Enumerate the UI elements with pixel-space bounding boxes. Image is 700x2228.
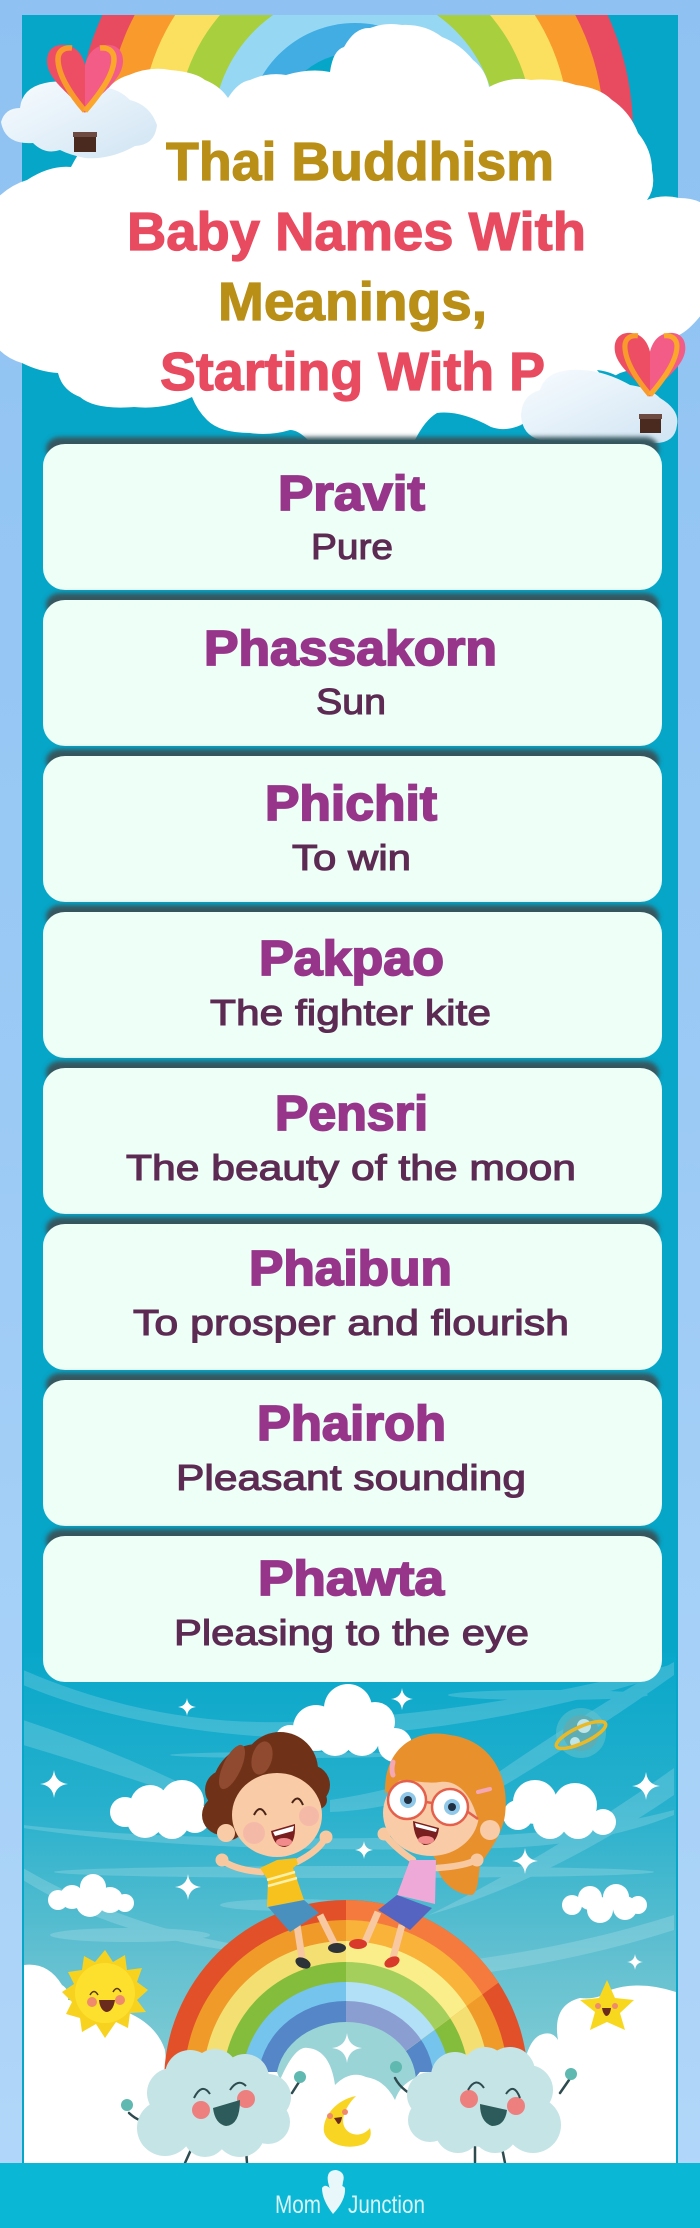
girl — [349, 1733, 506, 1970]
card: Pravit — [43, 437, 662, 590]
small cloud right — [521, 370, 677, 443]
card: Pensri — [43, 1061, 662, 1214]
MomJunction logo — [275, 2170, 425, 2219]
arms — [222, 1838, 325, 1872]
face — [383, 1780, 478, 1856]
cloud: small lower right — [562, 1884, 647, 1923]
cloud: right — [503, 1780, 616, 1839]
icon: sun — [62, 1950, 148, 2038]
MomJunction logo: Mom — [275, 2191, 321, 2219]
card: Pensri: The beauty of the moon — [126, 1147, 576, 1188]
sparkle inside rainbow — [332, 2033, 362, 2063]
header illustration — [0, 0, 700, 443]
icon: star — [580, 1980, 634, 2030]
card: Phassakorn: Sun — [316, 681, 386, 722]
card: Phawta: Phawta — [258, 1552, 445, 1606]
card: Pakpao — [43, 905, 662, 1058]
rainbow — [164, 1900, 526, 2100]
card: Phaibun: Phaibun — [249, 1242, 452, 1296]
footer band — [0, 2163, 700, 2228]
basket left — [73, 132, 97, 152]
hair — [202, 1732, 330, 1840]
boy — [202, 1732, 346, 1971]
card: Phichit — [43, 749, 662, 902]
card: Phairoh: Pleasant sounding — [176, 1457, 526, 1498]
glasses and eyes — [388, 1781, 478, 1825]
sky streaks — [23, 1662, 674, 1975]
mouth — [413, 1821, 439, 1845]
card: Pravit: Pravit — [278, 467, 425, 521]
big white cloud — [0, 24, 700, 440]
icon: crescent moon — [324, 2096, 371, 2147]
shirt — [260, 1858, 304, 1907]
card: Phichit: Phichit — [265, 777, 437, 831]
card: Pakpao: The fighter kite — [210, 992, 491, 1033]
bottom scene illustration — [24, 1662, 676, 2163]
white ground cloud covering rainbow feet — [178, 2048, 516, 2163]
title: Thai Buddhism — [166, 132, 554, 192]
arms — [385, 1835, 476, 1868]
card: Phairoh — [43, 1373, 662, 1526]
card: Phaibun: To prosper and flourish — [133, 1302, 569, 1343]
basket right — [639, 414, 662, 433]
title: Meanings, — [218, 272, 487, 332]
card: Phawta: Pleasing to the eye — [174, 1612, 529, 1653]
balloon left — [47, 45, 123, 113]
cloud: small lower left — [48, 1874, 134, 1917]
sparkles — [40, 1688, 660, 1970]
title — [127, 132, 586, 402]
legs and shoes — [349, 1912, 402, 1970]
icon: planet — [553, 1708, 609, 1758]
card: Phichit: To win — [292, 837, 411, 878]
balloon right — [615, 333, 685, 397]
shorts — [268, 1900, 319, 1932]
card: Phassakorn: Phassakorn — [204, 622, 497, 676]
card: Phassakorn — [43, 593, 662, 746]
MomJunction logo: Junction — [348, 2191, 425, 2219]
hair fringe — [385, 1770, 479, 1820]
legs and shoes — [294, 1915, 346, 1971]
skirt — [378, 1895, 432, 1930]
cloud: top center — [275, 1684, 412, 1762]
smiling cloud right — [390, 2047, 577, 2163]
card: Pakpao: Pakpao — [259, 932, 444, 986]
title: Baby Names With — [127, 202, 586, 262]
face — [232, 1773, 322, 1857]
card: Pravit: Pure — [311, 526, 393, 567]
white cloud bank — [24, 1964, 676, 2072]
top rainbow — [85, 15, 633, 122]
card: Phairoh: Phairoh — [257, 1397, 446, 1451]
card: Phawta — [43, 1529, 662, 1682]
cloud: left — [110, 1780, 210, 1839]
hair back — [385, 1733, 506, 1895]
title: Starting With P — [160, 342, 545, 402]
card: Phaibun — [43, 1217, 662, 1370]
small cloud left — [1, 82, 157, 158]
card: Pensri: Pensri — [275, 1087, 428, 1141]
teal gap behind right balloon — [597, 370, 640, 388]
top — [397, 1860, 436, 1904]
smiling cloud left — [121, 2049, 306, 2163]
